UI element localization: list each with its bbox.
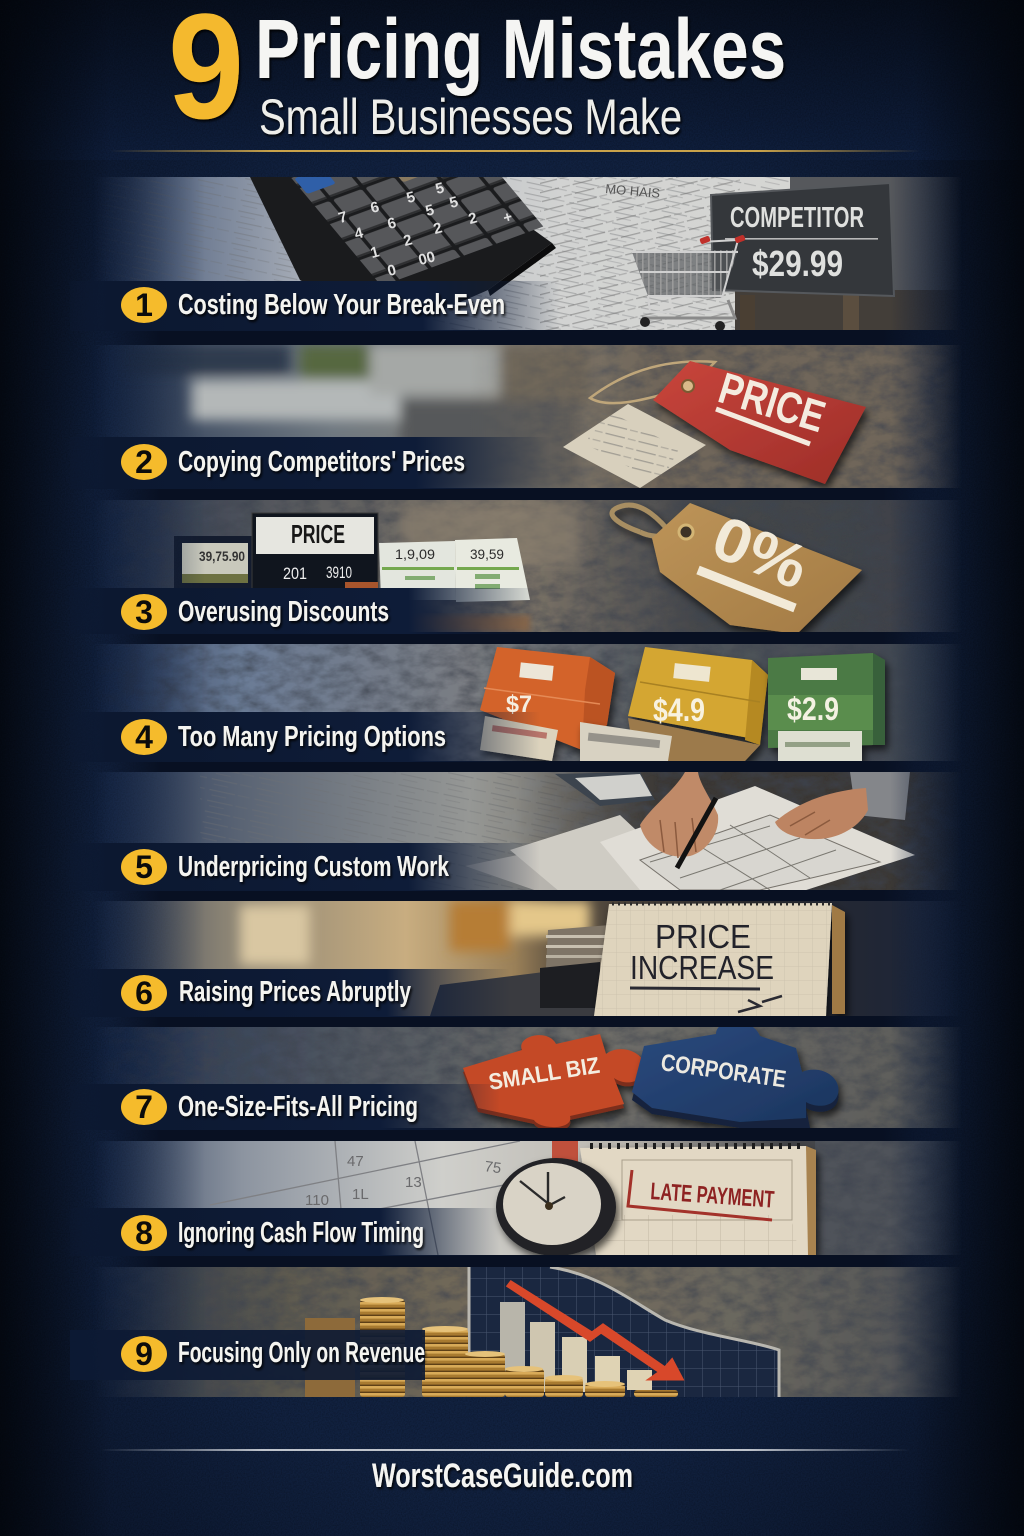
stacked books	[430, 925, 610, 1016]
calculator: 1	[369, 243, 381, 262]
green box: $2.9	[787, 691, 839, 727]
number badge 5	[121, 849, 167, 885]
shopping cart	[632, 234, 746, 331]
string	[590, 361, 715, 403]
label bar 8	[70, 1208, 500, 1256]
panel 6: raising prices abruptly	[60, 901, 970, 1027]
number badge 1	[121, 287, 167, 323]
panel 1: costing below break-even	[103, 177, 954, 345]
calculator: 2	[432, 219, 444, 238]
label bar 6	[70, 969, 510, 1017]
chart bars	[500, 1302, 652, 1392]
price cards: 1,9,09	[395, 546, 435, 562]
scene: calendar, clock and late payment pad: 13	[405, 1174, 422, 1191]
number badge 6: 6	[135, 975, 153, 1011]
stacked papers	[466, 772, 655, 890]
label bar 3	[70, 588, 540, 634]
dark small board	[174, 536, 252, 588]
calculator: 6	[369, 198, 381, 217]
main price board: PRICE	[291, 519, 345, 549]
falling chart	[468, 1267, 779, 1397]
panel 9: focusing only on revenue	[60, 1267, 970, 1397]
number badge 8: 8	[135, 1215, 153, 1251]
right hand and sleeve	[775, 772, 910, 839]
scene: calculator, receipts, cart and competitor sign	[108, 177, 954, 330]
blue puzzle piece	[632, 1022, 839, 1128]
number badge 9: 9	[135, 1336, 153, 1372]
number badge 4: 4	[135, 719, 153, 755]
panel 4: too many pricing options	[60, 644, 970, 772]
kraft 0% tag: 0%	[703, 503, 818, 603]
number badge 8	[121, 1215, 167, 1251]
number badge 7	[121, 1089, 167, 1125]
number badge 3	[121, 594, 167, 630]
label bar 7	[70, 1084, 500, 1130]
calculator: 5	[434, 179, 446, 198]
calendar grid	[210, 1141, 530, 1255]
label text 4: Too Many Pricing Options	[178, 721, 446, 753]
left hand and pen	[640, 772, 718, 868]
label bar 9	[70, 1330, 425, 1380]
label text 3: Overusing Discounts	[178, 596, 389, 628]
scene: coin stacks and falling chart	[60, 1267, 970, 1397]
title	[110, 0, 920, 152]
blurred storefront	[120, 345, 590, 490]
calculator: +	[501, 208, 514, 227]
label bar 4	[70, 712, 540, 762]
label text 9: Focusing Only on Revenue	[178, 1337, 425, 1369]
calculator: 0	[386, 261, 398, 280]
blue puzzle piece: CORPORATE	[659, 1049, 788, 1093]
main price board: 201	[283, 564, 307, 583]
scene: calculator, receipts, cart and competitor sign: MO HAIS	[605, 181, 661, 201]
scene: calendar, clock and late payment pad: 75	[483, 1158, 502, 1177]
label text 7: One-Size-Fits-All Pricing	[178, 1091, 418, 1123]
panel 2: copying competitors' prices	[60, 345, 970, 500]
calculator: 2	[467, 209, 479, 228]
calculator: 7	[337, 208, 349, 227]
calculator: 6	[386, 214, 398, 233]
note paper	[563, 404, 706, 488]
number badge 9	[121, 1336, 167, 1372]
scene: calendar, clock and late payment pad: 110	[305, 1192, 329, 1209]
scene: hands marking blueprints	[118, 772, 950, 890]
footer website: WorstCaseGuide.com	[372, 1457, 633, 1495]
scene: calendar, clock and late payment pad: 47	[347, 1153, 364, 1170]
label text 6: Raising Prices Abruptly	[179, 976, 411, 1008]
scene: three price boxes	[60, 644, 970, 761]
kraft 0% tag	[612, 503, 862, 634]
orange box: $7	[506, 691, 532, 718]
label text 5: Underpricing Custom Work	[178, 851, 450, 883]
competitor sign: $29.99	[752, 243, 843, 284]
scene: price boards and kraft tag	[60, 500, 970, 634]
red down arrow	[508, 1282, 682, 1379]
orange box	[480, 647, 615, 761]
panel 5: underpricing custom work	[60, 772, 970, 901]
footer divider	[100, 1449, 910, 1451]
competitor sign	[711, 183, 894, 330]
price cards	[379, 538, 530, 602]
number badge 4	[121, 719, 167, 755]
competitor sign: COMPETITOR	[730, 202, 864, 234]
clock	[496, 1158, 616, 1256]
calculator: 5	[405, 188, 417, 207]
blueprint sheet	[600, 786, 915, 892]
scene: price increase notepad	[112, 901, 925, 1016]
gold divider	[110, 150, 920, 152]
label text 1: Costing Below Your Break-Even	[178, 289, 505, 321]
number badge 3: 3	[135, 594, 153, 630]
number badge 2: 2	[135, 444, 153, 480]
number badge 5: 5	[135, 849, 153, 885]
scene: puzzle pieces	[60, 1022, 970, 1131]
number badge 2	[121, 444, 167, 480]
calculator: 5	[424, 201, 436, 220]
red puzzle piece: SMALL BIZ	[487, 1052, 601, 1095]
scene: calendar, clock and late payment pad	[60, 1141, 970, 1256]
red price tag: PRICE	[713, 364, 831, 442]
notepad	[594, 903, 845, 1016]
label text 8: Ignoring Cash Flow Timing	[178, 1217, 424, 1249]
notepad: PRICE	[655, 918, 751, 955]
calculator: 00	[417, 248, 437, 269]
main price board: 3910	[326, 563, 352, 582]
dark small board: 39,75.90	[199, 548, 245, 564]
price cards: 39,59	[470, 546, 504, 562]
yellow box	[580, 647, 768, 761]
calculator: 2	[402, 231, 414, 250]
red tab	[552, 1141, 578, 1163]
number badge 6	[121, 975, 167, 1011]
late payment notepad	[580, 1146, 816, 1255]
subheading: Small Businesses Make: Small Businesses Make	[259, 89, 682, 145]
yellow box: $4.9	[653, 692, 705, 728]
red price tag	[653, 361, 866, 484]
label bar 5	[70, 843, 540, 891]
label bar 2	[70, 437, 550, 489]
late payment notepad: LATE PAYMENT	[650, 1178, 775, 1214]
gritty ground	[470, 345, 970, 488]
heading: Pricing Mistakes: Pricing Mistakes	[255, 2, 786, 96]
notepad: INCREASE	[630, 949, 774, 986]
coin stacks	[305, 1297, 678, 1397]
main price board	[252, 512, 378, 588]
scene: calendar, clock and late payment pad: 1L	[352, 1186, 369, 1203]
number badge 1: 1	[135, 287, 153, 323]
green box	[768, 653, 885, 761]
panel 8: ignoring cash flow timing	[60, 1141, 970, 1267]
calculator	[250, 177, 556, 313]
panel 3: overusing discounts	[60, 500, 970, 644]
number badge 7: 7	[135, 1089, 153, 1125]
scene: red price tag on blurred street	[60, 345, 970, 490]
calculator: 4	[353, 224, 366, 243]
panel 7: one-size-fits-all pricing	[60, 1022, 970, 1141]
label bar 1	[70, 281, 560, 331]
calculator: 5	[448, 193, 460, 212]
label text 2: Copying Competitors' Prices	[178, 446, 465, 478]
red puzzle piece	[463, 1034, 644, 1131]
